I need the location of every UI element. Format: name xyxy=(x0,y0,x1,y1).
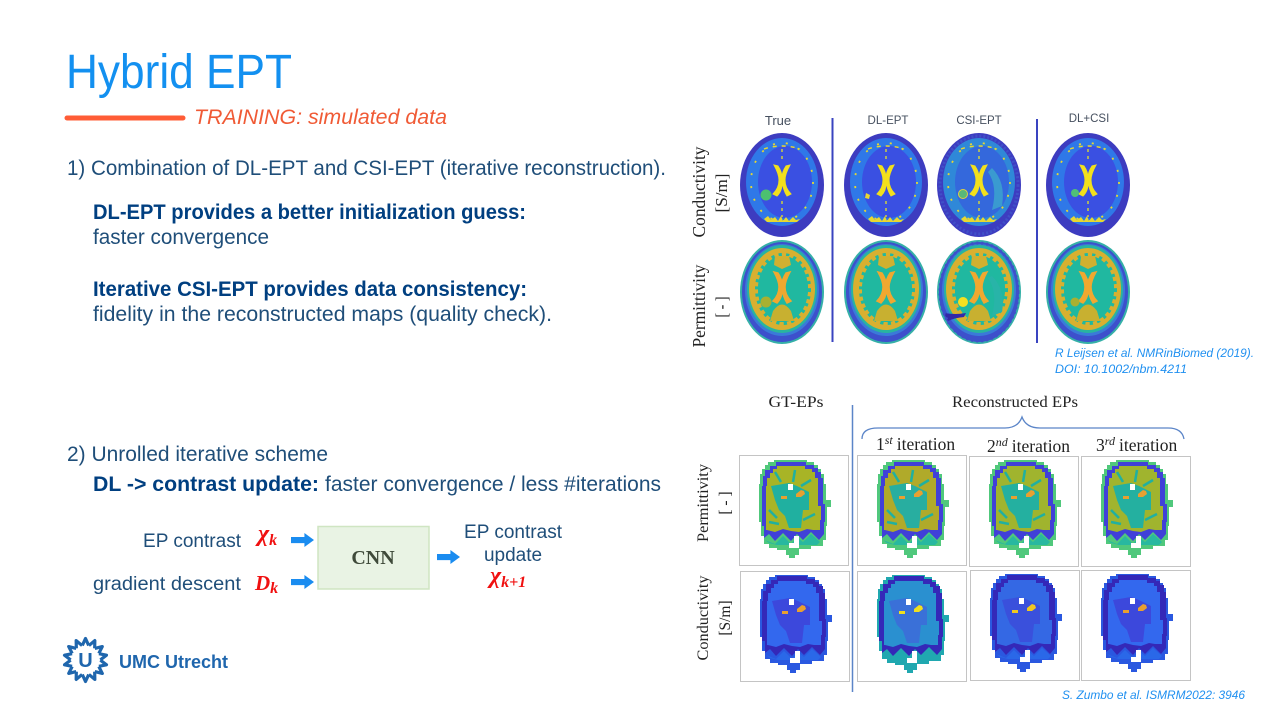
text block: unrolled scheme: faster convergence / less #iterations xyxy=(325,473,661,496)
panel: unrolled iteration results figure: iteration xyxy=(1012,436,1070,456)
diagram: CNN update scheme: k xyxy=(269,532,277,549)
text block: unrolled scheme: 2) Unrolled iterative scheme xyxy=(67,443,328,466)
panel: unrolled iteration results figure: rd xyxy=(1105,434,1116,448)
citation: Zumbo: S. Zumbo et al. ISMRM2022: 3946 xyxy=(1062,690,1246,702)
panel: DL+CSI comparison figure: Conductivity xyxy=(689,146,709,238)
panel: DL+CSI comparison figure: DL-EPT xyxy=(868,115,908,127)
diagram: CNN update scheme: D xyxy=(255,571,270,595)
panel: DL+CSI comparison figure: [ - ] xyxy=(712,296,731,318)
text block: combination: Iterative CSI-EPT provides data consistency: xyxy=(93,278,527,301)
panel: DL+CSI comparison figure: Permittivity xyxy=(689,264,709,348)
panel: unrolled iteration results figure: 3 xyxy=(1096,435,1105,455)
title: Hybrid EPT xyxy=(66,46,292,99)
text block: unrolled scheme xyxy=(67,443,661,496)
logo: UMC Utrecht: U xyxy=(78,650,93,672)
citation: Leijsen: R Leijsen et al. NMRinBiomed (2019). xyxy=(1055,348,1254,360)
diagram: CNN update scheme: χ xyxy=(490,563,501,589)
diagram: CNN update scheme: CNN xyxy=(351,547,395,569)
logo: UMC Utrecht: UMC Utrecht xyxy=(119,652,228,672)
panel: unrolled iteration results figure: [S/m] xyxy=(717,600,734,636)
panel: unrolled iteration results figure: st xyxy=(885,433,893,447)
diagram: CNN update scheme: EP contrast xyxy=(464,522,563,543)
panel: DL+CSI comparison figure: [S/m] xyxy=(712,174,731,212)
panel: unrolled iteration results figure xyxy=(695,394,1190,692)
panel: unrolled iteration results figure: [ - ] xyxy=(717,491,734,515)
text block: combination: fidelity in the reconstructed maps (quality check). xyxy=(93,303,552,326)
citation: Leijsen: DOI: 10.1002/nbm.4211 xyxy=(1055,364,1187,376)
text block: combination xyxy=(67,157,666,326)
panel: unrolled iteration results figure: 1 xyxy=(876,434,885,454)
diagram: CNN update scheme: EP contrast xyxy=(143,531,242,552)
diagram: CNN update scheme xyxy=(93,521,563,597)
orange accent line xyxy=(67,116,183,120)
text block: combination: faster convergence xyxy=(93,226,269,249)
text block: unrolled scheme: DL -> contrast update: xyxy=(93,473,319,496)
panel: DL+CSI comparison figure xyxy=(689,113,1130,348)
diagram: CNN update scheme: gradient descent xyxy=(93,574,242,595)
panel: unrolled iteration results figure: Conductivity xyxy=(695,575,712,660)
panel: unrolled iteration results figure: GT-EPs xyxy=(768,394,824,411)
panel: unrolled iteration results figure: nd xyxy=(996,435,1009,449)
panel: DL+CSI comparison figure: True xyxy=(765,113,791,128)
logo: UMC Utrecht xyxy=(64,638,228,682)
diagram: CNN update scheme: χ xyxy=(258,521,269,547)
panel: unrolled iteration results figure: iteration xyxy=(1119,435,1178,455)
diagram: CNN update scheme: k+1 xyxy=(501,574,526,591)
panel: DL+CSI comparison figure: DL+CSI xyxy=(1069,113,1109,125)
subtitle: TRAINING: simulated data xyxy=(194,106,447,129)
panel: DL+CSI comparison figure: CSI-EPT xyxy=(956,115,1002,127)
diagram: CNN update scheme: k xyxy=(270,580,278,597)
panel: unrolled iteration results figure: iteration xyxy=(897,434,955,454)
panel: unrolled iteration results figure: 2 xyxy=(987,436,996,456)
panel: unrolled iteration results figure: Reconstructed EPs xyxy=(952,394,1078,411)
text block: combination: DL-EPT provides a better initialization guess: xyxy=(93,201,526,224)
citation: Leijsen xyxy=(1055,348,1254,376)
panel: unrolled iteration results figure: Permittivity xyxy=(695,464,712,542)
text block: combination: 1) Combination of DL-EPT and CSI-EPT (iterative reconstruction). xyxy=(67,157,666,180)
diagram: CNN update scheme: update xyxy=(484,545,542,566)
